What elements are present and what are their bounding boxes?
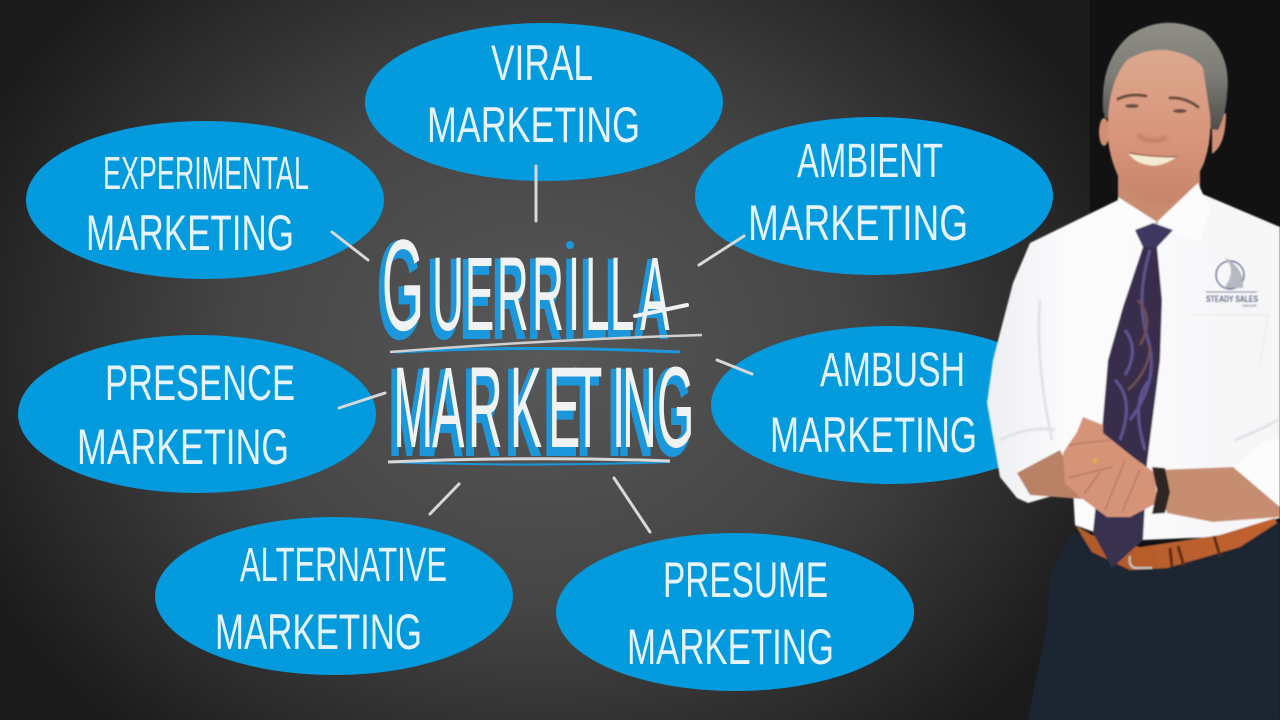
ellipse: ambush marketing: MARKETING bbox=[770, 407, 977, 463]
eyes bbox=[1125, 104, 1187, 113]
ellipse: alternative marketing: ALTERNATIVE bbox=[240, 539, 447, 592]
tie paisley bbox=[1105, 232, 1162, 534]
hands bbox=[1063, 417, 1157, 517]
ellipse: ambush marketing: AMBUSH bbox=[820, 344, 965, 397]
ellipse: presence marketing bbox=[18, 335, 376, 493]
left forearm bbox=[1017, 450, 1082, 499]
title blue shadow: G bbox=[378, 219, 420, 364]
title white lettering bbox=[382, 214, 702, 472]
ellipse: experimental marketing: EXPERIMENTAL bbox=[103, 147, 309, 199]
pocket logo: GROUP bbox=[1242, 303, 1257, 308]
title white lettering: UERRILLA bbox=[432, 236, 670, 353]
person bbox=[987, 23, 1280, 720]
title blue shadow bbox=[378, 219, 690, 477]
ellipse: viral marketing: MARKETING bbox=[427, 97, 640, 153]
pocket logo: STEADY SALES bbox=[1206, 294, 1258, 305]
ellipse: experimental marketing bbox=[26, 121, 384, 279]
belt bbox=[1075, 518, 1277, 570]
brows bbox=[1118, 95, 1198, 107]
ellipse: ambush marketing bbox=[711, 326, 1069, 484]
ellipse: ambient marketing: AMBIENT bbox=[797, 135, 943, 188]
pocket logo bbox=[1206, 257, 1258, 308]
ellipse: presume marketing: MARKETING bbox=[627, 619, 834, 675]
neck bbox=[1118, 160, 1200, 226]
title blue shadow: MARKETING bbox=[389, 348, 690, 477]
ellipse: presume marketing bbox=[556, 533, 914, 691]
ellipse: presume marketing: PRESUME bbox=[663, 552, 828, 608]
right sleeve cuff bbox=[1233, 438, 1280, 507]
pocket outline bbox=[1192, 315, 1268, 365]
nose shadow bbox=[1138, 135, 1167, 141]
shirt folds bbox=[1000, 300, 1278, 440]
ellipse: alternative marketing: MARKETING bbox=[215, 604, 422, 660]
title: guerrilla marketing bbox=[378, 214, 702, 477]
ellipse: experimental marketing: MARKETING bbox=[86, 205, 294, 261]
trousers bbox=[1028, 522, 1280, 720]
tie knot bbox=[1135, 223, 1173, 247]
tie bbox=[1093, 223, 1173, 568]
ellipse: ambient marketing: MARKETING bbox=[748, 195, 968, 251]
wristband bbox=[1152, 467, 1170, 514]
shirt torso bbox=[987, 193, 1280, 540]
title blue shadow: UERRILLA bbox=[428, 241, 666, 358]
connector lines bbox=[332, 166, 752, 532]
background: dark right band bbox=[1090, 0, 1280, 720]
right forearm bbox=[1157, 467, 1280, 522]
smile bbox=[1128, 153, 1177, 166]
tie tip over belt bbox=[1093, 512, 1143, 568]
title white lettering: G bbox=[382, 214, 424, 359]
ellipse: alternative marketing bbox=[155, 517, 513, 675]
face bbox=[1108, 50, 1210, 204]
ellipse: ambient marketing bbox=[695, 117, 1053, 275]
hair bbox=[1103, 23, 1228, 130]
ellipse: viral marketing: VIRAL bbox=[491, 35, 593, 91]
collar bbox=[1115, 183, 1210, 242]
ears bbox=[1099, 113, 1226, 154]
ellipse: presence marketing: PRESENCE bbox=[105, 355, 295, 411]
title white lettering: MARKETING bbox=[393, 343, 694, 472]
ellipse: viral marketing bbox=[365, 23, 723, 181]
ellipse: presence marketing: MARKETING bbox=[77, 419, 289, 475]
